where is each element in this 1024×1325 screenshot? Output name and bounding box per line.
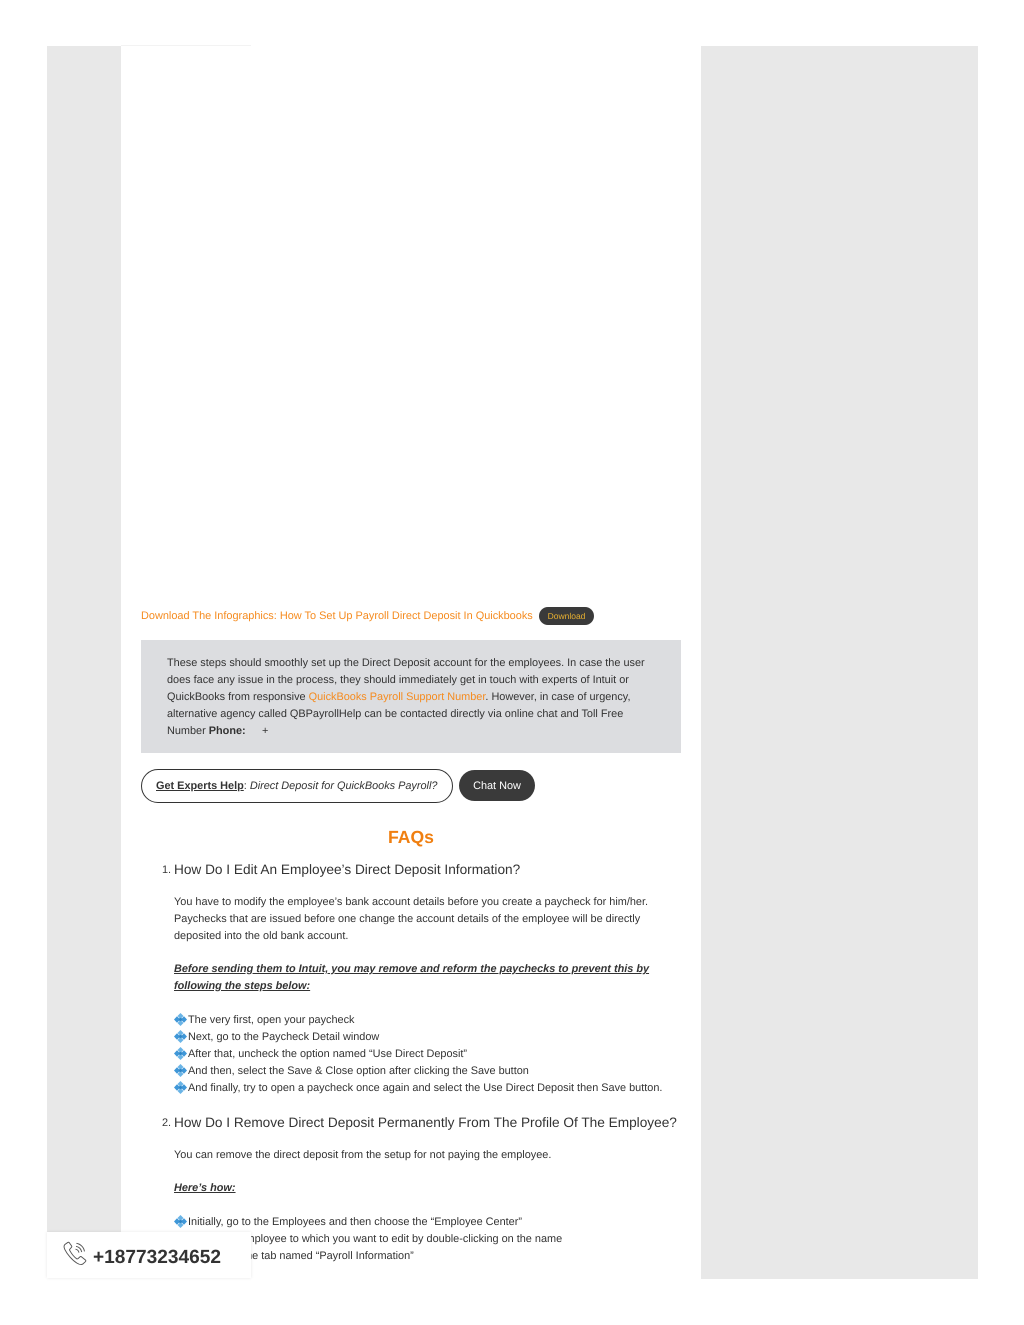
- FAQ 2 step list: Initially, go to the Employees and then choose the “Employee Center”: [188, 1216, 522, 1228]
- FAQ 1 answer: You have to modify the employee’s bank account details before you create a paycheck for him/her.: [174, 896, 648, 908]
- callout text: +: [262, 725, 268, 737]
- FAQ 2 steps intro: Here’s how:: [174, 1182, 236, 1194]
- phone number: +18773234652: [93, 1247, 221, 1268]
- callout text: QuickBooks from responsive QuickBooks Payroll Support Number. However, in case of urgency,: [167, 691, 630, 703]
- FAQ 1 steps intro: following the steps below:: [174, 980, 310, 992]
- FAQ 2 step list: [174, 1215, 562, 1262]
- download infographic link: Download The Infographics: How To Set Up Payroll Direct Deposit In Quickbooks: [141, 610, 533, 622]
- FAQ 1 step list: And finally, try to open a paycheck once again and select the Use Direct Deposit then Save button.: [188, 1082, 662, 1094]
- FAQ 2 question: 2.: [162, 1117, 171, 1129]
- chat now button: Chat Now: [473, 780, 521, 792]
- callout text: does face any issue in the process, they should immediately get in touch with experts of Intuit or: [167, 674, 629, 686]
- floating phone bar: [47, 1232, 251, 1278]
- callout panel: support information: [141, 640, 681, 753]
- download button: Download: [548, 611, 585, 621]
- right sidebar panel: [701, 46, 978, 1279]
- left sidebar panel: [47, 46, 121, 1232]
- FAQ 1 answer: [174, 896, 648, 942]
- callout text: alternative agency called QBPayrollHelp can be contacted directly via online chat and Toll Free: [167, 708, 623, 720]
- callout text: [167, 657, 645, 737]
- download button: [539, 607, 594, 625]
- FAQ 1 step list: After that, uncheck the option named “Use Direct Deposit”: [188, 1048, 467, 1060]
- FAQ 2 question: How Do I Remove Direct Deposit Permanently From The Profile Of The Employee?: [174, 1115, 677, 1130]
- FAQ 1 answer: Paychecks that are issued before one change the account details of the employee will be directly: [174, 913, 640, 925]
- FAQ 1: [162, 862, 662, 1094]
- callout text: These steps should smoothly set up the Direct Deposit account for the employees. In case the user: [167, 657, 645, 669]
- FAQ 1 step list: [174, 1013, 662, 1094]
- FAQ 1 answer: deposited into the old bank account.: [174, 930, 348, 942]
- experts help pill: Get Experts Help: Direct Deposit for QuickBooks Payroll?: [156, 780, 437, 792]
- FAQ 2 answer: You can remove the direct deposit from the setup for not paying the employee.: [174, 1149, 551, 1161]
- chat now button: [459, 770, 535, 801]
- FAQ 1 step list: The very first, open your paycheck: [188, 1014, 354, 1026]
- FAQ 1 question: How Do I Edit An Employee’s Direct Deposit Information?: [174, 862, 520, 877]
- FAQ 1 question: 1.: [162, 864, 171, 876]
- callout text: Number Phone:: [167, 725, 246, 737]
- FAQ 1 step list: And then, select the Save & Close option after clicking the Save button: [188, 1065, 529, 1077]
- FAQ 1 steps intro: [174, 963, 650, 992]
- FAQ 2: [162, 1115, 677, 1262]
- FAQ 2 step list: Then, click the tab named “Payroll Information”: [188, 1250, 414, 1262]
- FAQs heading: FAQs: [388, 827, 434, 847]
- FAQ 2 step list: Select the employee to which you want to edit by double-clicking on the name: [188, 1233, 562, 1245]
- icon: phone: [64, 1242, 86, 1265]
- experts help pill: [141, 769, 453, 803]
- FAQ 1 step list: Next, go to the Paycheck Detail window: [188, 1031, 379, 1043]
- FAQ 1 steps intro: Before sending them to Intuit, you may remove and reform the paychecks to prevent this by: [174, 963, 649, 975]
- top bar shadow: [121, 45, 251, 46]
